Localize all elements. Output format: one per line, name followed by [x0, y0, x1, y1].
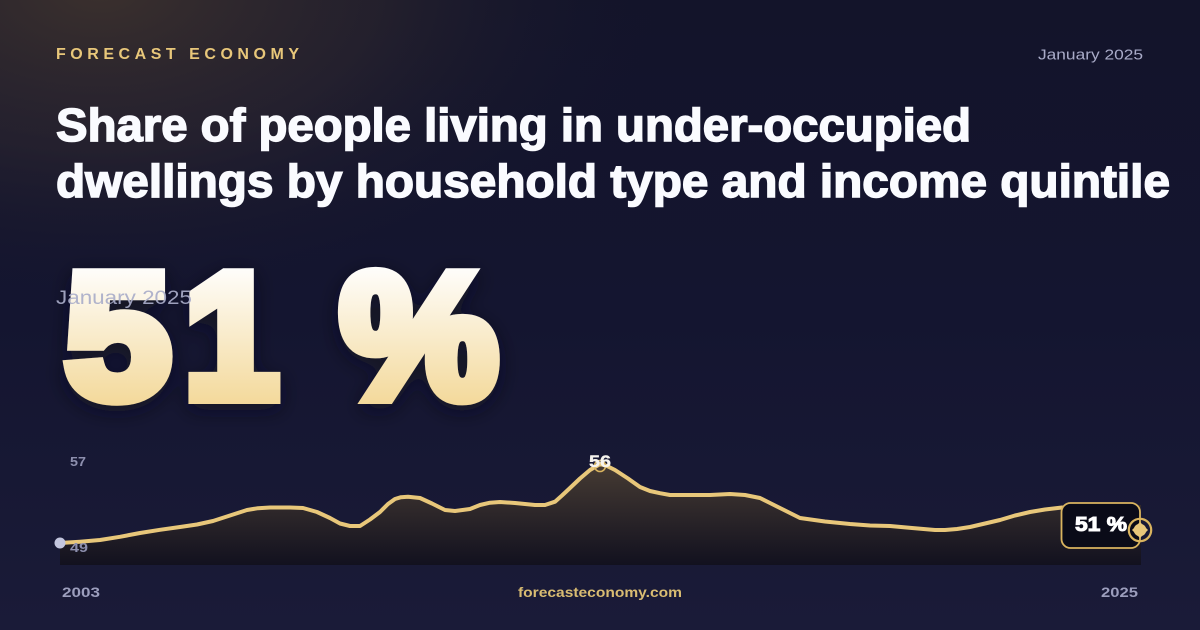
- date overlay: January 2025: [56, 288, 192, 309]
- end marker: [1129, 519, 1151, 541]
- title: dwellings by household type and income quintile: [56, 155, 1170, 207]
- big number: 5: [65, 237, 170, 435]
- source url: forecasteconomy.com: [518, 584, 682, 600]
- peak marker: [594, 460, 606, 472]
- axis min label: 49: [70, 540, 88, 555]
- callout: [1062, 503, 1140, 548]
- date top right: January 2025: [1038, 46, 1143, 64]
- x axis start year: 2003: [62, 584, 100, 600]
- title: Share of people living in under-occupied: [56, 99, 971, 151]
- area fill: [60, 464, 1141, 565]
- title: [56, 99, 1170, 207]
- area chart: [54, 452, 1141, 565]
- peak label: 56: [589, 452, 611, 471]
- x axis end year: 2025: [1101, 584, 1138, 600]
- big number: 1: [184, 237, 278, 435]
- brand label: FORECAST ECONOMY: [56, 46, 299, 63]
- axis max label: 57: [70, 454, 86, 469]
- big number: %: [340, 237, 498, 435]
- big number: [65, 237, 498, 435]
- callout: 51 %: [1075, 514, 1127, 536]
- start point: [54, 538, 66, 548]
- trend line: [60, 464, 1062, 543]
